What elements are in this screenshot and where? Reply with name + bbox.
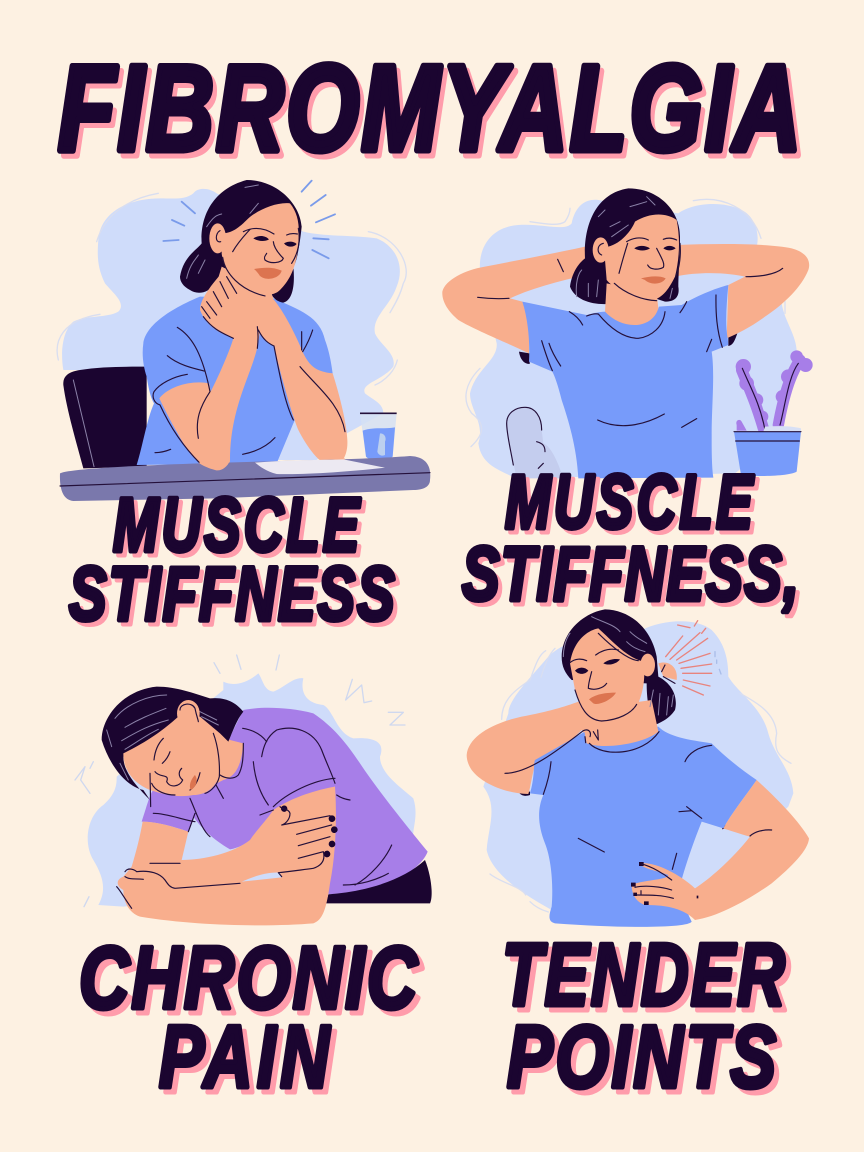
raised arm xyxy=(467,702,598,794)
heading: tender points: POINTS xyxy=(507,1008,776,1106)
face xyxy=(123,715,220,796)
facial features xyxy=(216,228,297,296)
hair xyxy=(180,180,302,303)
heading: chronic pain: CHRONIC xyxy=(84,933,424,1032)
heading: muscle stiffness left: MUSCLE xyxy=(117,487,365,572)
shirt xyxy=(530,727,757,927)
face xyxy=(605,215,679,301)
arm on hip xyxy=(632,780,809,920)
heading: tender points: TENDER xyxy=(507,932,790,1029)
heading: muscle stiffness left: STIFFNESS xyxy=(69,552,395,637)
right arm and hand xyxy=(247,292,347,467)
left arm xyxy=(442,247,592,353)
ear xyxy=(640,654,655,676)
shirt xyxy=(142,708,428,894)
hand behind head xyxy=(658,662,677,680)
plant xyxy=(734,350,813,476)
background blob xyxy=(483,621,793,920)
neck xyxy=(200,717,243,783)
arm and shirt lines xyxy=(117,728,392,908)
panel: top-left muscle stiffness at desk xyxy=(57,180,430,501)
title: FIBROMYALGIA xyxy=(62,45,805,182)
hair strands xyxy=(576,197,672,298)
arm and shirt lines xyxy=(505,730,772,898)
desk xyxy=(60,456,430,501)
face xyxy=(222,203,299,295)
heading: tender points xyxy=(502,927,790,1111)
heading: muscle stiffness right: STIFFNESS, xyxy=(466,536,803,621)
heading: chronic pain: PAIN xyxy=(164,1012,336,1111)
background blob xyxy=(88,673,416,907)
facial features xyxy=(150,704,219,807)
hair xyxy=(562,609,676,725)
heading: tender points: TENDER xyxy=(502,927,785,1024)
ear xyxy=(177,700,200,727)
shirt xyxy=(522,285,728,478)
heading: chronic pain xyxy=(79,928,424,1111)
heading: muscle stiffness right: STIFFNESS, xyxy=(462,532,799,617)
pain marks xyxy=(75,655,405,907)
arm and shirt lines xyxy=(153,277,345,463)
hair strands xyxy=(107,695,218,780)
heading: chronic pain: CHRONIC xyxy=(79,928,419,1027)
hair xyxy=(570,188,680,304)
pants xyxy=(326,860,432,903)
glass xyxy=(360,413,397,460)
heading: muscle stiffness left xyxy=(69,483,399,641)
heading: muscle stiffness left: STIFFNESS xyxy=(73,556,399,641)
shirt xyxy=(137,297,333,465)
panel: bottom-right tender points figure xyxy=(467,609,809,927)
chair xyxy=(507,407,563,478)
neck xyxy=(217,267,273,303)
hair strands xyxy=(563,617,673,715)
facial features xyxy=(570,633,675,721)
heading: muscle stiffness right xyxy=(462,460,803,621)
hair strands xyxy=(187,185,258,278)
background blob xyxy=(470,200,797,478)
chair xyxy=(63,367,147,468)
facial features xyxy=(598,238,677,301)
panel: top-right stretching figure xyxy=(442,188,813,478)
arm and shirt lines xyxy=(478,268,783,427)
neck xyxy=(580,700,658,746)
pain rays xyxy=(163,181,335,258)
nails xyxy=(281,805,338,857)
ear xyxy=(593,237,609,263)
heading: tender points: POINTS xyxy=(512,1013,781,1111)
heading: muscle stiffness left: MUSCLE xyxy=(113,483,361,568)
arm xyxy=(118,787,336,925)
paper xyxy=(255,459,385,474)
underarm shadows xyxy=(519,333,737,364)
background blob xyxy=(62,189,400,460)
nails xyxy=(631,862,698,905)
right arm xyxy=(675,244,809,338)
hair xyxy=(102,687,243,800)
pain rays xyxy=(666,621,712,695)
heading: chronic pain: PAIN xyxy=(159,1007,331,1106)
face xyxy=(570,628,644,721)
ear xyxy=(209,223,226,253)
underarm shadows xyxy=(518,792,730,829)
heading: muscle stiffness right: MUSCLE xyxy=(509,464,758,549)
heading: muscle stiffness right: MUSCLE xyxy=(505,460,754,545)
gap between arms xyxy=(242,873,282,882)
title: FIBROMYALGIA xyxy=(58,40,801,177)
left arm and hand xyxy=(159,275,261,470)
neck xyxy=(605,283,658,325)
panel: bottom-left chronic pain figure xyxy=(75,655,432,925)
